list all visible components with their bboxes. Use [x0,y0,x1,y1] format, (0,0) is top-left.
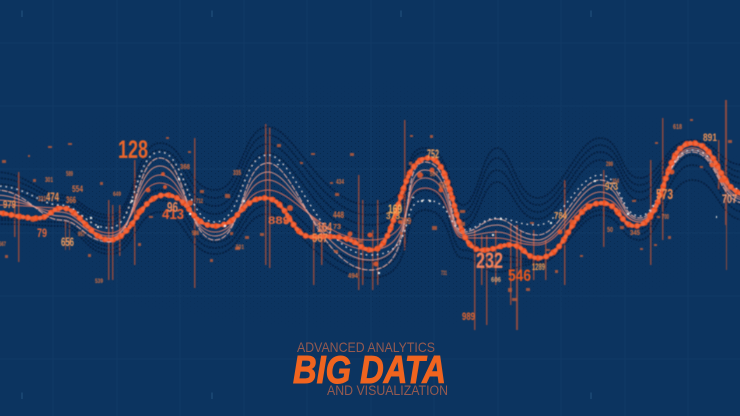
small data numbers: 73 [333,224,341,231]
large data numbers: 169 [388,202,402,216]
wave chart: main orange line [0,143,740,258]
large data numbers: 784 [554,211,567,222]
large data numbers: 164 [317,219,332,235]
large data numbers: 128 [118,136,148,164]
small data numbers: 366 [66,195,76,205]
large data numbers: 373 [386,211,400,221]
title: big data: BIG DATA [293,349,446,392]
grid markers: I [400,9,402,19]
small data numbers: 335 [233,170,241,177]
small data numbers: 539 [95,279,104,285]
large data numbers: 474 [46,190,59,204]
small data numbers: 731 [441,271,447,277]
large data numbers: 891 [703,132,717,144]
scattered small squares [2,119,732,301]
small data numbers: 448 [333,210,344,220]
title line: and visualization: AND VISUALIZATION [327,383,448,398]
extra data points [30,162,725,266]
small data numbers: 700 [662,214,669,221]
small data numbers: 618 [673,124,682,131]
wave chart: pink and white lines [0,145,740,270]
title line: advanced analytics: ADVANCED ANALYTICS [297,339,435,355]
small data numbers: 501 [236,245,245,251]
small data numbers: 50 [607,227,613,234]
small data numbers: 957 [78,232,85,238]
wave chart: dark dashed lower lines [0,155,740,278]
large data numbers: 752 [427,147,439,161]
grid markers: I [211,9,213,19]
large data numbers: 96 [167,199,178,216]
large data numbers: 413 [162,206,184,223]
grid markers: I [590,391,592,401]
grid markers: I [211,391,213,401]
vertical data bars [14,100,727,330]
small data numbers: 434 [336,179,344,186]
small data numbers: 606 [491,277,501,284]
small data numbers: 649 [113,192,122,198]
grid markers: I [590,9,592,19]
small data numbers: 712 [196,199,203,205]
large data numbers: 889 [268,215,290,227]
small data numbers: 301 [45,177,53,184]
small data numbers: 554 [72,184,83,194]
title block [293,339,448,398]
wave chart: dark dashed upper lines [0,127,740,235]
small data numbers: 588 [192,231,199,237]
small data numbers: 789 [400,216,411,226]
small data numbers: 589 [66,171,73,178]
small data numbers: 567 [430,172,439,178]
large data numbers: 979 [3,199,16,211]
small data numbers: 345 [630,230,640,237]
large data numbers: 573 [656,186,673,203]
small data numbers: 682 [439,181,448,190]
small data numbers: 331 [38,196,46,203]
grid markers: I [21,391,23,401]
large data numbers: 79 [37,226,47,240]
large data numbers [3,132,737,323]
large data numbers: 1289 [532,262,545,272]
large data numbers: 973 [605,181,618,193]
small data numbers: 289 [606,162,613,168]
scattered white points [90,164,717,274]
large data numbers: 546 [508,266,531,285]
grid markers: I [21,9,23,19]
large data numbers: 656 [61,235,74,249]
large data numbers: 567 [312,231,328,245]
grid markers [21,9,592,401]
large data numbers: 989 [462,311,475,323]
large data numbers: 232 [476,248,503,273]
small data numbers: 368 [180,164,190,171]
small data numbers: 354 [612,179,619,185]
small data numbers: 494 [348,273,358,280]
chart area [0,100,740,330]
small data numbers [0,124,682,285]
